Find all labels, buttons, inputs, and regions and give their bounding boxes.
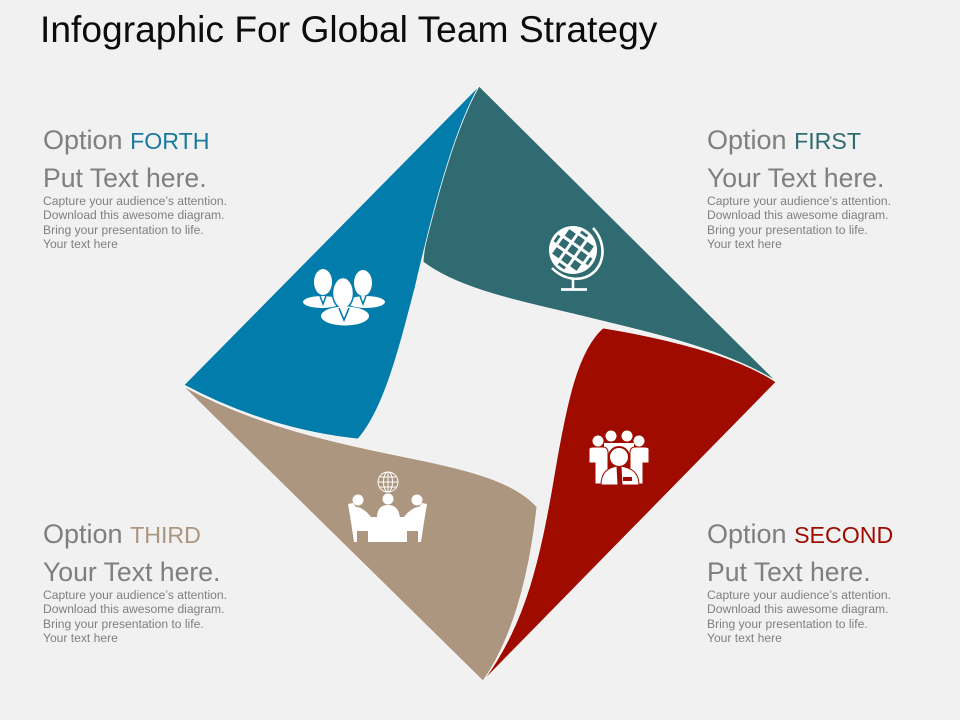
text block: option second: Download this awesome diagram.	[707, 602, 888, 616]
text block: option second: Put Text here.	[707, 557, 871, 587]
text block: option third	[43, 519, 227, 645]
text block: option first	[707, 125, 891, 251]
text block: option first: Bring your presentation to life.	[707, 223, 868, 237]
icon: globe	[544, 221, 602, 290]
text block: option third: Your text here	[43, 631, 118, 645]
text block: option third: Option THIRD	[43, 519, 201, 549]
text block: option second: Bring your presentation to life.	[707, 617, 868, 631]
text block: option third: Capture your audience’s attention.	[43, 588, 227, 602]
text block: option forth: Capture your audience’s attention.	[43, 194, 227, 208]
text block: option third: Bring your presentation to life.	[43, 617, 204, 631]
text block: option first: Option FIRST	[707, 125, 861, 155]
text block: option third: Your Text here.	[43, 557, 220, 587]
segment: red second	[483, 328, 776, 681]
text block: option first: Download this awesome diagram.	[707, 208, 888, 222]
text block: option forth: Option FORTH	[43, 125, 210, 155]
segment: blue fourth	[184, 86, 479, 439]
text block: option forth: Download this awesome diagram.	[43, 208, 224, 222]
text block: option third: Download this awesome diagram.	[43, 602, 224, 616]
text block: option first: Your Text here.	[707, 163, 884, 193]
title: Infographic For Global Team Strategy	[40, 8, 657, 50]
text block: option first: Your text here	[707, 237, 782, 251]
text block: option second: Option SECOND	[707, 519, 893, 549]
segment: teal first	[423, 86, 776, 381]
text block: option forth: Bring your presentation to life.	[43, 223, 204, 237]
text block: option forth: Your text here	[43, 237, 118, 251]
text block: option second: Capture your audience’s attention.	[707, 588, 891, 602]
text block: option forth: Put Text here.	[43, 163, 207, 193]
text block: option second	[707, 519, 893, 645]
text block: option second: Your text here	[707, 631, 782, 645]
icon: meeting with globe	[348, 472, 427, 542]
segment: tan third	[183, 386, 537, 681]
icon: team with leader	[589, 430, 649, 485]
text block: option first: Capture your audience’s attention.	[707, 194, 891, 208]
icon: business team	[303, 269, 385, 326]
text block: option forth	[43, 125, 227, 251]
